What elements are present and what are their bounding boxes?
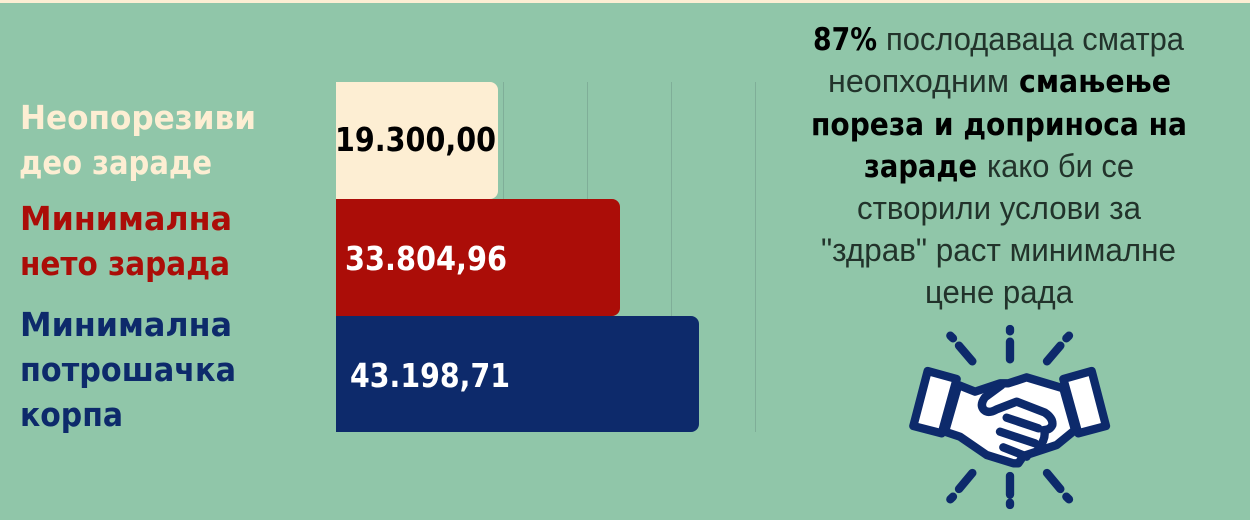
label: Минимална нето зарада: нето зарада xyxy=(20,244,230,283)
text block: 87% статистика: како би се xyxy=(987,148,1134,184)
text block: 87% статистика: послодаваца сматра xyxy=(886,21,1184,57)
text block: 87% статистика: цене рада xyxy=(925,274,1073,310)
label: Минимална потрошачка корпа: Минимална xyxy=(20,305,232,344)
label: Неопорезиви део зараде xyxy=(19,98,256,182)
label: Минимална потрошачка корпа xyxy=(20,305,236,434)
text block: 87% статистика: створили услови за xyxy=(857,190,1141,226)
label: Минимална потрошачка корпа: потрошачка xyxy=(20,350,236,389)
text block: 87% статистика: зараде xyxy=(864,149,977,185)
bar: 19.300,00 xyxy=(335,82,498,199)
label: Минимална нето зарада: Минимална xyxy=(20,199,232,238)
icon: handshake xyxy=(913,329,1106,505)
text block: 87% статистика: неопходним xyxy=(828,63,1009,99)
bar: 33.804,96: 33.804,96 xyxy=(345,239,507,278)
bar: 43.198,71: 43.198,71 xyxy=(350,356,510,395)
text block: 87% статистика: смањење xyxy=(1019,64,1171,100)
text block: 87% статистика: 87% xyxy=(813,22,877,58)
text block: 87% статистика xyxy=(811,21,1187,310)
label: Минимална нето зарада xyxy=(20,199,232,283)
bar: 33.804,96 xyxy=(336,199,620,316)
label: Минимална потрошачка корпа: корпа xyxy=(20,395,123,434)
bar: 19.300,00: 19.300,00 xyxy=(335,120,496,159)
text block: 87% статистика: "здрав" раст минималне xyxy=(821,232,1176,268)
text block: 87% статистика: пореза и доприноса на xyxy=(811,107,1187,143)
bar: 43.198,71 xyxy=(336,316,699,432)
label: Неопорезиви део зараде: Неопорезиви xyxy=(20,98,256,137)
label: Неопорезиви део зараде: део зараде xyxy=(19,143,212,182)
